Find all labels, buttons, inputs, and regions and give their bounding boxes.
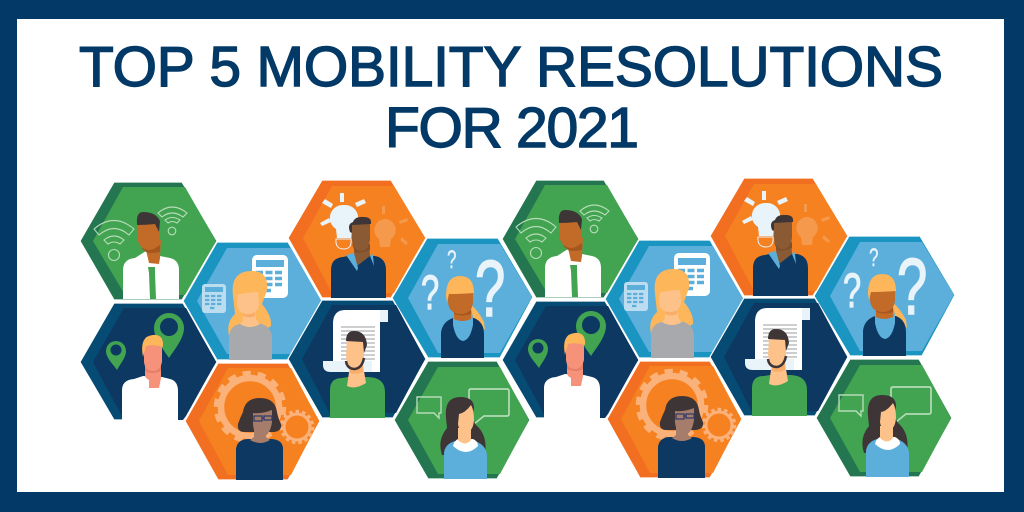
icon: question marks bbox=[843, 243, 927, 332]
icon: wifi signal left bbox=[516, 218, 556, 258]
icon: small calculator bbox=[202, 284, 226, 313]
person: woman with ponytail bbox=[441, 276, 485, 358]
person: woman with long dark hair bbox=[440, 397, 487, 479]
panel: speech woman bbox=[394, 361, 530, 479]
icon: small gear bbox=[282, 412, 312, 442]
icon: large map pin bbox=[154, 313, 184, 358]
panel: document man bbox=[710, 298, 848, 416]
person: man in white shirt bbox=[123, 212, 179, 299]
icon: light bulb faint bbox=[374, 206, 408, 247]
person: bearded man in green bbox=[330, 331, 385, 418]
panel: gears woman bbox=[607, 361, 742, 478]
icon: question marks bbox=[421, 245, 505, 334]
panel: location man bbox=[502, 301, 639, 418]
person: woman with ponytail bbox=[863, 274, 907, 356]
icon: wifi signal right bbox=[158, 207, 187, 235]
person: blonde woman bbox=[650, 269, 694, 358]
panel: location man bbox=[80, 303, 217, 420]
person: blond man in white shirt bbox=[544, 333, 600, 418]
panel: question woman bbox=[392, 238, 533, 358]
icon: large calculator bbox=[252, 255, 288, 298]
icon: question marks: ? bbox=[843, 264, 861, 318]
panel: idea man bbox=[710, 178, 848, 296]
title bbox=[79, 35, 943, 160]
title: TOP 5 MOBILITY RESOLUTIONS bbox=[79, 35, 943, 99]
icon: large calculator bbox=[674, 253, 710, 296]
person: man in navy sweater bbox=[331, 217, 386, 298]
hexagon cluster: right set bbox=[502, 178, 955, 478]
panel: calculator woman bbox=[605, 240, 744, 358]
panel: calculator woman bbox=[183, 242, 322, 360]
icon: paper scroll bbox=[323, 310, 388, 372]
person: man in white shirt bbox=[545, 210, 601, 297]
title: FOR 2021 bbox=[385, 96, 639, 160]
icon: wifi signal right bbox=[580, 205, 609, 233]
icon: question marks: ? bbox=[475, 245, 505, 334]
icon: large speech bubble bbox=[891, 387, 931, 422]
hexagon cluster: left set bbox=[80, 180, 533, 480]
icon: large speech bubble bbox=[469, 389, 509, 424]
person: blond man in white shirt bbox=[122, 335, 178, 420]
icon: question marks: ? bbox=[421, 266, 439, 320]
icon: question marks: ? bbox=[447, 246, 457, 274]
icon: wifi signal left bbox=[94, 220, 134, 260]
icon: large gear bbox=[217, 374, 283, 440]
icon: small map pin bbox=[106, 341, 126, 370]
person: woman with glasses bbox=[658, 396, 705, 478]
person: woman with glasses bbox=[236, 398, 283, 480]
person: blonde woman bbox=[228, 271, 272, 360]
icon: paper scroll bbox=[745, 308, 810, 370]
icon: small speech bubble bbox=[417, 397, 441, 418]
panel: wifi man bbox=[80, 182, 217, 300]
icon: question marks: ? bbox=[869, 244, 879, 272]
icon: small gear bbox=[704, 410, 734, 440]
panel: gears woman bbox=[185, 363, 320, 480]
icon: light bulb white bbox=[742, 191, 788, 247]
person: woman with long dark hair bbox=[862, 395, 909, 477]
panel: speech woman bbox=[816, 359, 952, 477]
icon: large map pin bbox=[576, 311, 606, 356]
panel: document man bbox=[288, 300, 426, 418]
person: man in navy sweater bbox=[753, 215, 808, 296]
icon: small calculator bbox=[624, 282, 648, 311]
icon: large gear bbox=[639, 372, 705, 438]
icon: small speech bubble bbox=[839, 395, 863, 416]
icon: light bulb white bbox=[320, 193, 366, 249]
icon: small map pin bbox=[528, 339, 548, 368]
icon: light bulb faint bbox=[796, 204, 830, 245]
panel: idea man bbox=[288, 180, 426, 298]
panel: wifi man bbox=[502, 180, 639, 298]
person: bearded man in green bbox=[752, 329, 807, 416]
panel: question woman bbox=[814, 236, 955, 356]
icon: question marks: ? bbox=[897, 243, 927, 332]
